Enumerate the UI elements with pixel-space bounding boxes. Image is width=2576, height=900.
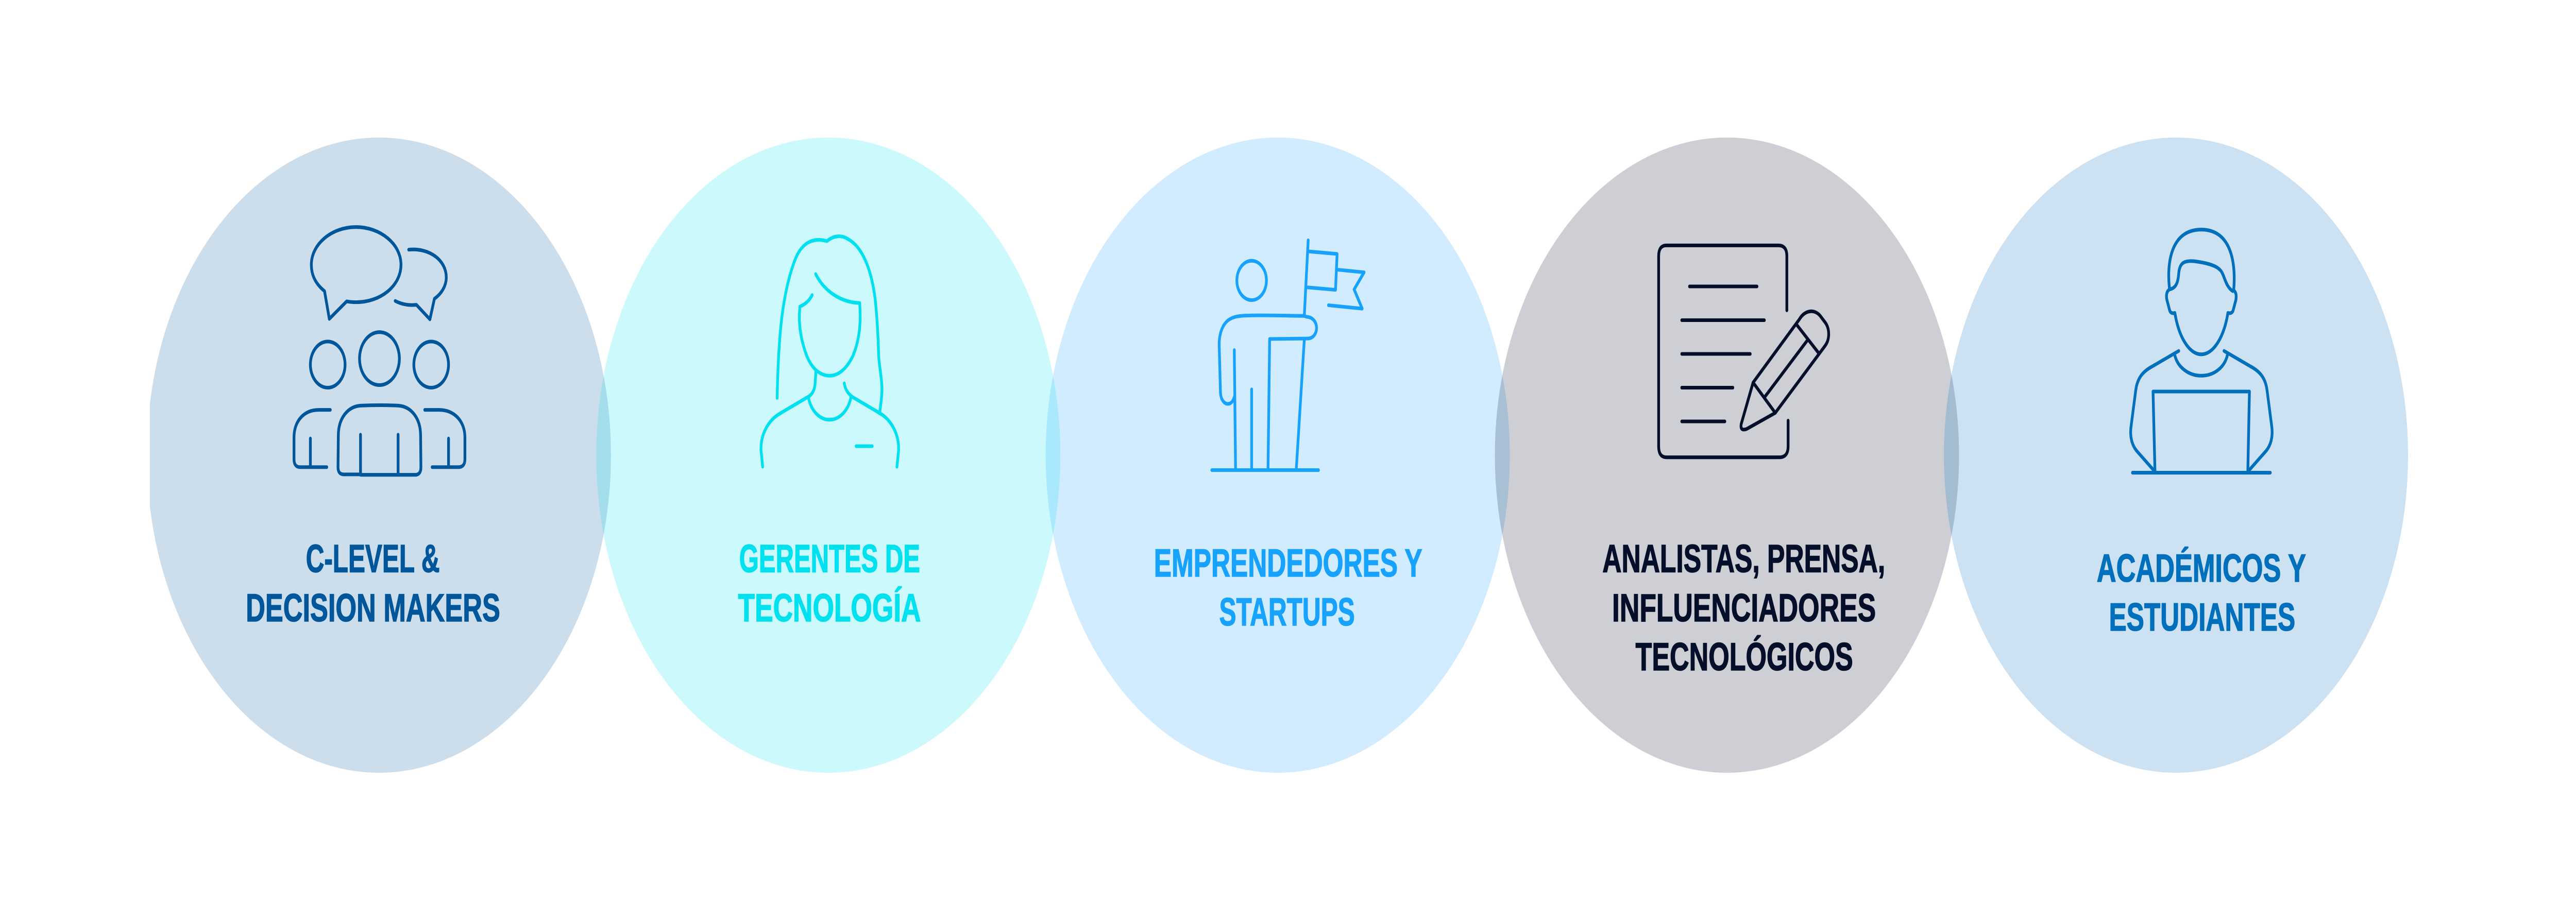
heading: gerentes [738,537,921,630]
heading: C-level: DECISION MAKERS [246,586,500,630]
heading: C-level [246,537,500,630]
heading: gerentes: GERENTES DE [739,537,920,581]
heading: gerentes: TECNOLOGÍA [738,586,921,630]
heading: analistas: ANALISTAS, PRENSA, [1602,537,1885,581]
heading: academicos: ACADÉMICOS Y [2097,547,2306,590]
icon: student at laptop [2131,230,2272,473]
icon: person with flag [1212,240,1364,470]
heading: emprendedores: EMPRENDEDORES Y [1154,541,1422,585]
panel: gerentes circle [596,138,1060,773]
heading: emprendedores: STARTUPS [1219,590,1355,634]
heading: C-level: C-LEVEL & [306,537,440,581]
panel: academicos circle [1944,138,2408,773]
panel: emprendedores circle [1046,138,1510,773]
panel: C-level circle [147,138,611,773]
heading: analistas [1602,537,1885,679]
heading: academicos [2097,547,2306,639]
infographic: audience circles [150,138,2408,773]
heading: academicos: ESTUDIANTES [2109,596,2295,639]
heading: analistas: TECNOLÓGICOS [1636,635,1853,679]
icon: woman [761,236,899,467]
heading: emprendedores [1154,541,1422,634]
icon: people with speech bubbles [294,227,465,475]
heading: analistas: INFLUENCIADORES [1612,586,1876,630]
icon: document and pencil [1658,245,1828,457]
panel: analistas circle [1495,138,1959,773]
